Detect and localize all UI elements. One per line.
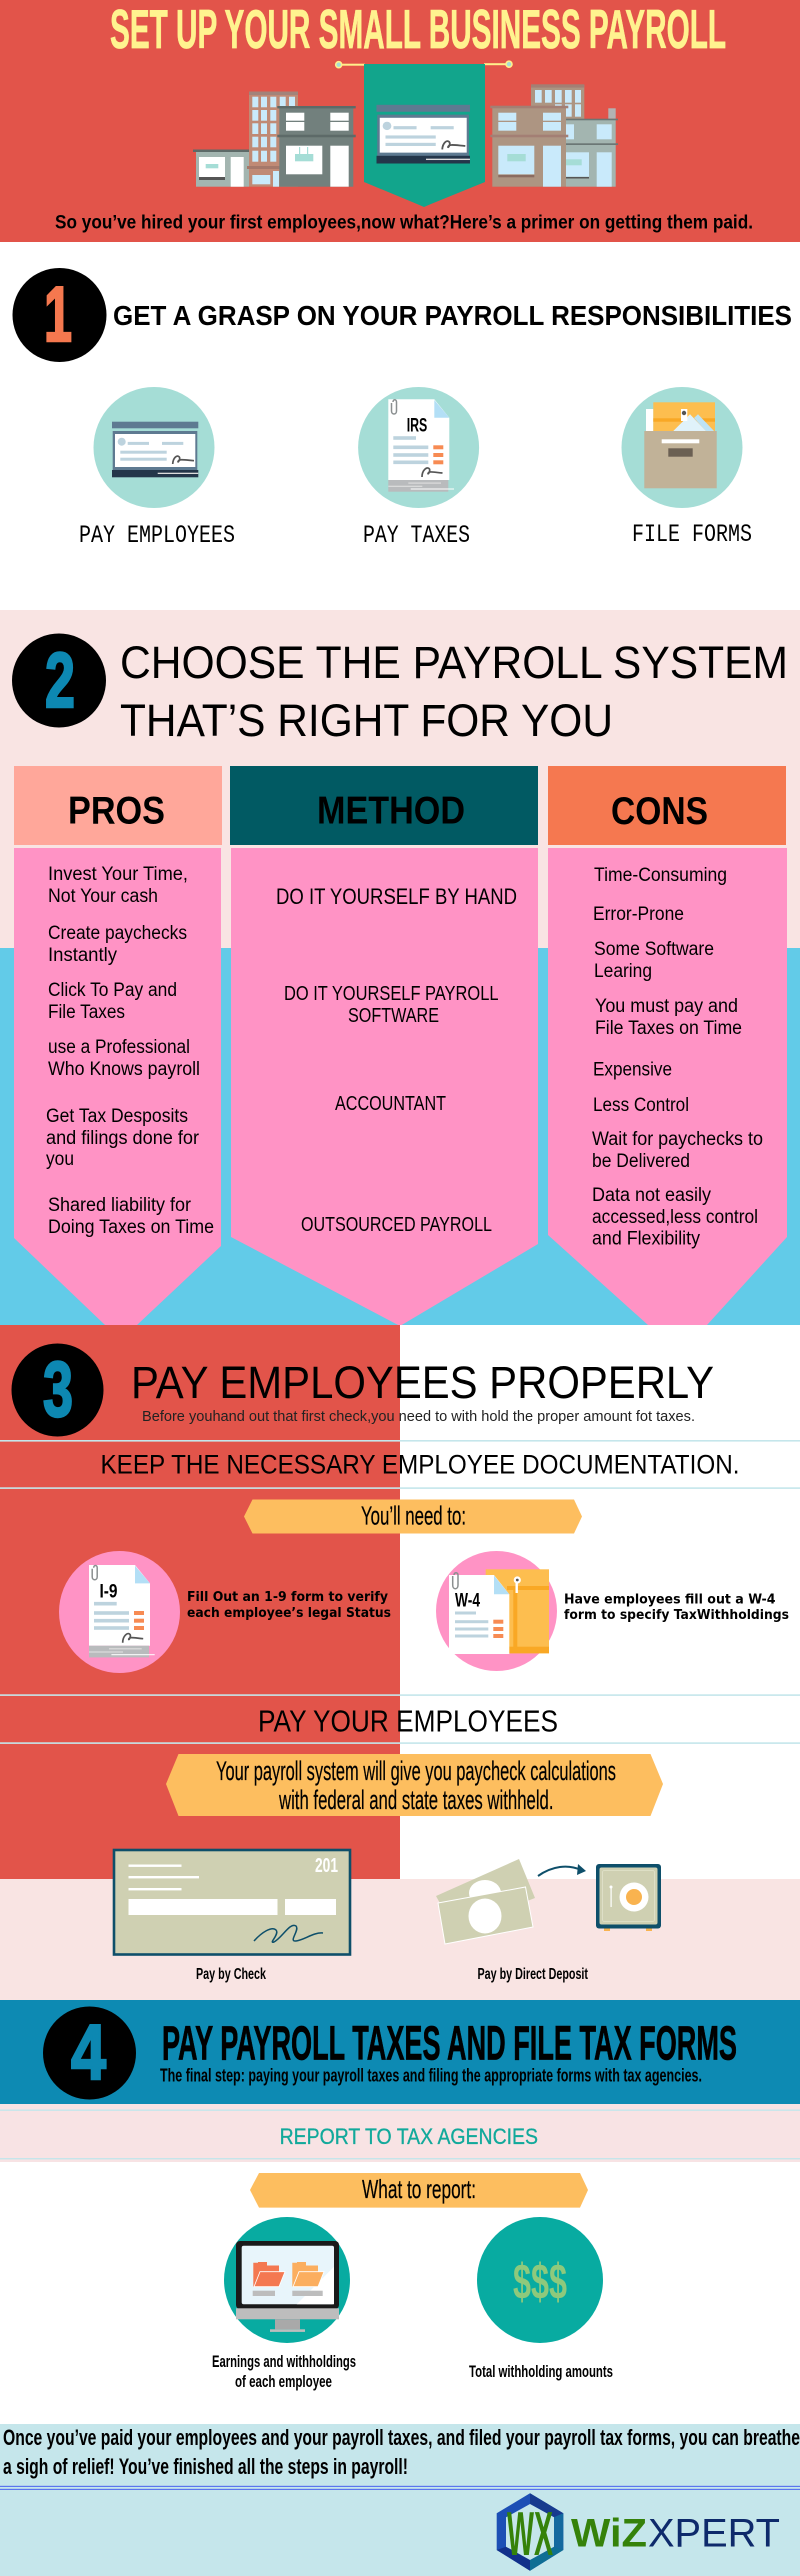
column: pros: you: [46, 1149, 74, 1170]
label: file forms: FILE FORMS: [632, 520, 752, 549]
icon: I-9 form: [59, 1551, 180, 1673]
icon: pay taxes: [358, 387, 479, 508]
column: pros: Shared liability for: [48, 1195, 192, 1216]
panel: closing footer: [0, 2424, 800, 2576]
column: cons: Some Software: [594, 939, 714, 960]
illustration: teal banner: [364, 64, 485, 207]
column: cons: and Flexibility: [592, 1228, 700, 1250]
step 2 heading: THAT’S RIGHT FOR YOU: [120, 695, 613, 746]
column: cons: Expensive: [593, 1060, 672, 1080]
icon: pay employees: [94, 387, 214, 508]
logo: WizXpert: XPERT: [648, 2512, 780, 2556]
illustration: right buildings: [490, 84, 618, 187]
step 3 heading: PAY EMPLOYEES PROPERLY: [131, 1357, 714, 1408]
column: method: METHOD: [317, 790, 465, 832]
banner: payroll system note: [166, 1754, 663, 1816]
column: cons: Time-Consuming: [594, 865, 727, 886]
label: pay by direct deposit: Pay by Direct Deposit: [478, 1966, 588, 1983]
logo: WizXpert: WX: [507, 2500, 553, 2569]
column: method: DO IT YOURSELF BY HAND: [276, 884, 517, 909]
banner: payroll system note: with federal and state taxes withheld.: [278, 1785, 554, 1815]
step 1 badge: 1: [44, 270, 72, 358]
icon: paycheck on banner: [376, 105, 470, 164]
icon: dollar signs: $$$: [513, 2254, 567, 2310]
banner: you'll need to: [244, 1500, 582, 1534]
column: cons: Learing: [594, 961, 652, 982]
closing message: [3, 2425, 800, 2479]
column: pros: [14, 766, 222, 1325]
column: pros: Not Your cash: [48, 886, 158, 907]
panel: step 2 payroll system: [0, 610, 800, 1326]
column: pros: Click To Pay and: [48, 980, 177, 1001]
icon: paper check: [114, 1850, 350, 1954]
icon: W-4 form: [436, 1551, 557, 1671]
step 2 badge: 2: [45, 636, 75, 724]
column: method: ACCOUNTANT: [335, 1093, 446, 1115]
logo: WizXpert: [497, 2493, 780, 2571]
icon: safe: [596, 1864, 661, 1931]
column: method: SOFTWARE: [348, 1005, 439, 1027]
label: pay taxes: PAY TAXES: [363, 521, 470, 550]
column: cons: File Taxes on Time: [595, 1018, 742, 1039]
column: cons: Less Control: [593, 1095, 689, 1116]
report heading: REPORT TO TAX AGENCIES: [280, 2124, 538, 2149]
column: cons: accessed,less control: [592, 1207, 758, 1228]
column: method: DO IT YOURSELF PAYROLL: [284, 983, 498, 1005]
arrow: to safe: [538, 1864, 586, 1876]
banner: what to report: What to report:: [362, 2174, 476, 2204]
icon: W-4 form: W-4: [455, 1590, 480, 1612]
documentation heading: KEEP THE NECESSARY EMPLOYEE DOCUMENTATION.: [100, 1450, 740, 1480]
column: pros: File Taxes: [48, 1002, 125, 1023]
column: method: OUTSOURCED PAYROLL: [301, 1214, 492, 1236]
banner: you'll need to: You’ll need to:: [361, 1500, 466, 1530]
column: cons: Error-Prone: [593, 904, 684, 925]
icon: computer with folders: [224, 2217, 350, 2343]
step 1 badge: [12, 268, 106, 362]
icon: cash bills: [436, 1859, 535, 1944]
column: cons: [548, 766, 787, 1325]
step 2 badge: [12, 634, 106, 728]
text: W-4 instruction: Have employees fill out a W-4: [564, 1592, 776, 1608]
step 3 badge: 3: [43, 1345, 73, 1433]
column: cons: You must pay and: [595, 996, 738, 1017]
icon: pay taxes: IRS: [407, 415, 427, 437]
pay your employees heading: PAY YOUR EMPLOYEES: [258, 1705, 558, 1739]
step 4 badge: [43, 2006, 136, 2100]
closing message: a sigh of relief! You’ve finished all the steps in payroll!: [3, 2454, 408, 2479]
icon: file forms: [622, 387, 742, 508]
column: pros: Create paychecks: [48, 923, 187, 944]
text: I-9 instruction: Fill Out an 1-9 form to verify: [187, 1589, 388, 1605]
illustration: left buildings: [193, 92, 356, 187]
logo: WizXpert: WiZ: [571, 2512, 647, 2556]
column: pros: and filings done for: [46, 1128, 200, 1149]
text: I-9 instruction: each employee’s legal Status: [187, 1605, 391, 1621]
label: earnings and withholdings: Earnings and withholdings: [212, 2353, 356, 2371]
text: W-4 instruction: [564, 1592, 789, 1623]
panel: header: [0, 0, 800, 242]
column: pros: Invest Your Time,: [48, 864, 188, 885]
column: cons: be Delivered: [592, 1151, 690, 1172]
panel: step 4 taxes: [0, 2000, 800, 2424]
column: pros: Doing Taxes on Time: [48, 1217, 214, 1238]
step 3 badge: [12, 1344, 104, 1436]
label: pay by check: Pay by Check: [196, 1966, 266, 1983]
column: pros: Instantly: [48, 945, 117, 966]
icon: I-9 form: I-9: [100, 1580, 118, 1602]
label: total withholding amounts: Total withholding amounts: [469, 2363, 613, 2381]
column: method: [230, 766, 538, 1326]
panel: step 1 responsibilities: [0, 242, 800, 610]
column: pros: PROS: [68, 790, 165, 832]
column: cons: Data not easily: [592, 1185, 711, 1206]
illustration: hanging pins: [336, 61, 512, 68]
label: earnings and withholdings: [212, 2353, 356, 2391]
label: earnings and withholdings: of each employee: [235, 2373, 332, 2391]
step 3 subheading: Before youhand out that first check,you need to with hold the proper amount fot taxes.: [142, 1408, 695, 1425]
panel: step 3 pay employees: [0, 1325, 800, 2000]
text: I-9 instruction: [187, 1589, 391, 1621]
column: cons: Wait for paychecks to: [592, 1129, 763, 1150]
icon: paper check: 201: [315, 1855, 338, 1877]
column: pros: Get Tax Desposits: [46, 1106, 188, 1127]
step 4 badge: 4: [71, 2008, 106, 2096]
label: pay employees: PAY EMPLOYEES: [79, 521, 235, 550]
column: pros: Who Knows payroll: [48, 1059, 200, 1080]
banner: what to report: [250, 2173, 588, 2208]
step 2 heading: [120, 637, 788, 746]
column: cons: CONS: [611, 790, 708, 833]
icon: dollar signs: [477, 2217, 603, 2343]
column: pros: use a Professional: [48, 1037, 190, 1058]
